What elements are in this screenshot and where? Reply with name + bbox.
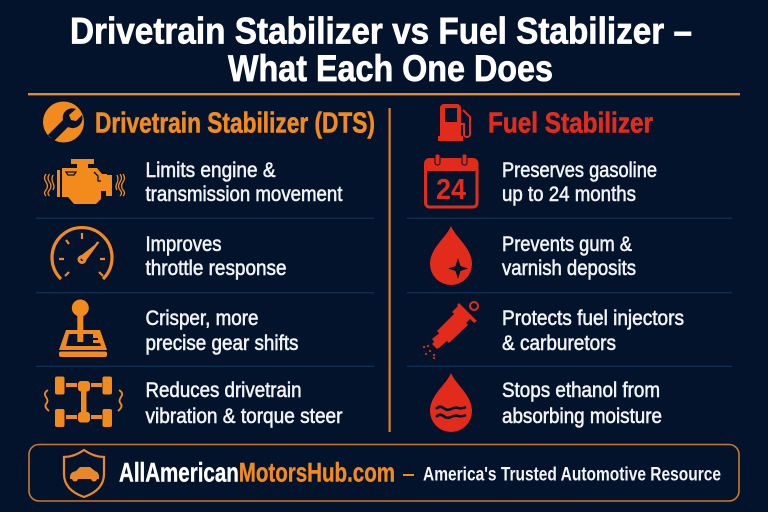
- text: gear shifts: [146, 307, 298, 355]
- text: throttle: throttle response: [146, 257, 286, 280]
- text: ethanol: [502, 379, 662, 428]
- icon: gear shifter: [59, 300, 107, 357]
- text: limits engine: [146, 159, 343, 206]
- footer banner: [29, 444, 739, 501]
- text: ethanol: Stops ethanol from: [502, 379, 660, 402]
- text: limits engine: Limits engine &: [146, 159, 276, 182]
- text: ethanol: absorbing moisture: [502, 405, 662, 428]
- text: preserves gasoline: up to 24 months: [502, 183, 636, 206]
- title: What Each One Does: [228, 48, 553, 89]
- text: vibration: Reduces drivetrain: [146, 379, 302, 402]
- icon: speedometer: [52, 228, 112, 279]
- text: vibration: vibration & torque steer: [146, 405, 342, 428]
- icon: drivetrain chassis: [45, 376, 122, 427]
- icon: drop with spark: [430, 226, 472, 285]
- text: preserves gasoline: [502, 159, 657, 206]
- heading: fuel: Fuel Stabilizer: [488, 108, 653, 140]
- icon: fuel injector: [423, 302, 478, 359]
- text: gear shifts: precise gear shifts: [146, 332, 298, 355]
- icon: drop with waves: [430, 373, 472, 432]
- text: injectors: [502, 307, 684, 355]
- icon: engine: [44, 159, 124, 204]
- text: vibration: [146, 379, 342, 428]
- panel: drivetrain stabilizer: [36, 102, 375, 428]
- text: limits engine: transmission movement: [146, 183, 343, 206]
- panel: fuel stabilizer: [407, 104, 732, 432]
- brand name: AllAmericanMotorsHub.com: [119, 458, 395, 488]
- icon: fuel pump: [438, 104, 470, 141]
- icon: calendar: 24: [436, 174, 466, 206]
- icon: shield with car: [64, 450, 104, 497]
- title: [70, 10, 692, 89]
- text: gum: [502, 233, 636, 280]
- text: throttle: [146, 233, 286, 280]
- text: gum: Prevents gum &: [502, 233, 632, 256]
- text: preserves gasoline: Preserves gasoline: [502, 159, 657, 182]
- icon: wrench: [43, 102, 84, 142]
- text: injectors: Protects fuel injectors: [502, 307, 684, 330]
- text: gum: varnish deposits: [502, 257, 636, 280]
- text: gear shifts: Crisper, more: [146, 307, 258, 330]
- title: Drivetrain Stabilizer vs Fuel Stabilizer –: [70, 10, 692, 52]
- text: throttle: Improves: [146, 233, 222, 256]
- icon: calendar: [425, 154, 477, 207]
- text: injectors: & carburetors: [502, 332, 616, 355]
- heading: drivetrain: Drivetrain Stabilizer (DTS): [95, 108, 375, 140]
